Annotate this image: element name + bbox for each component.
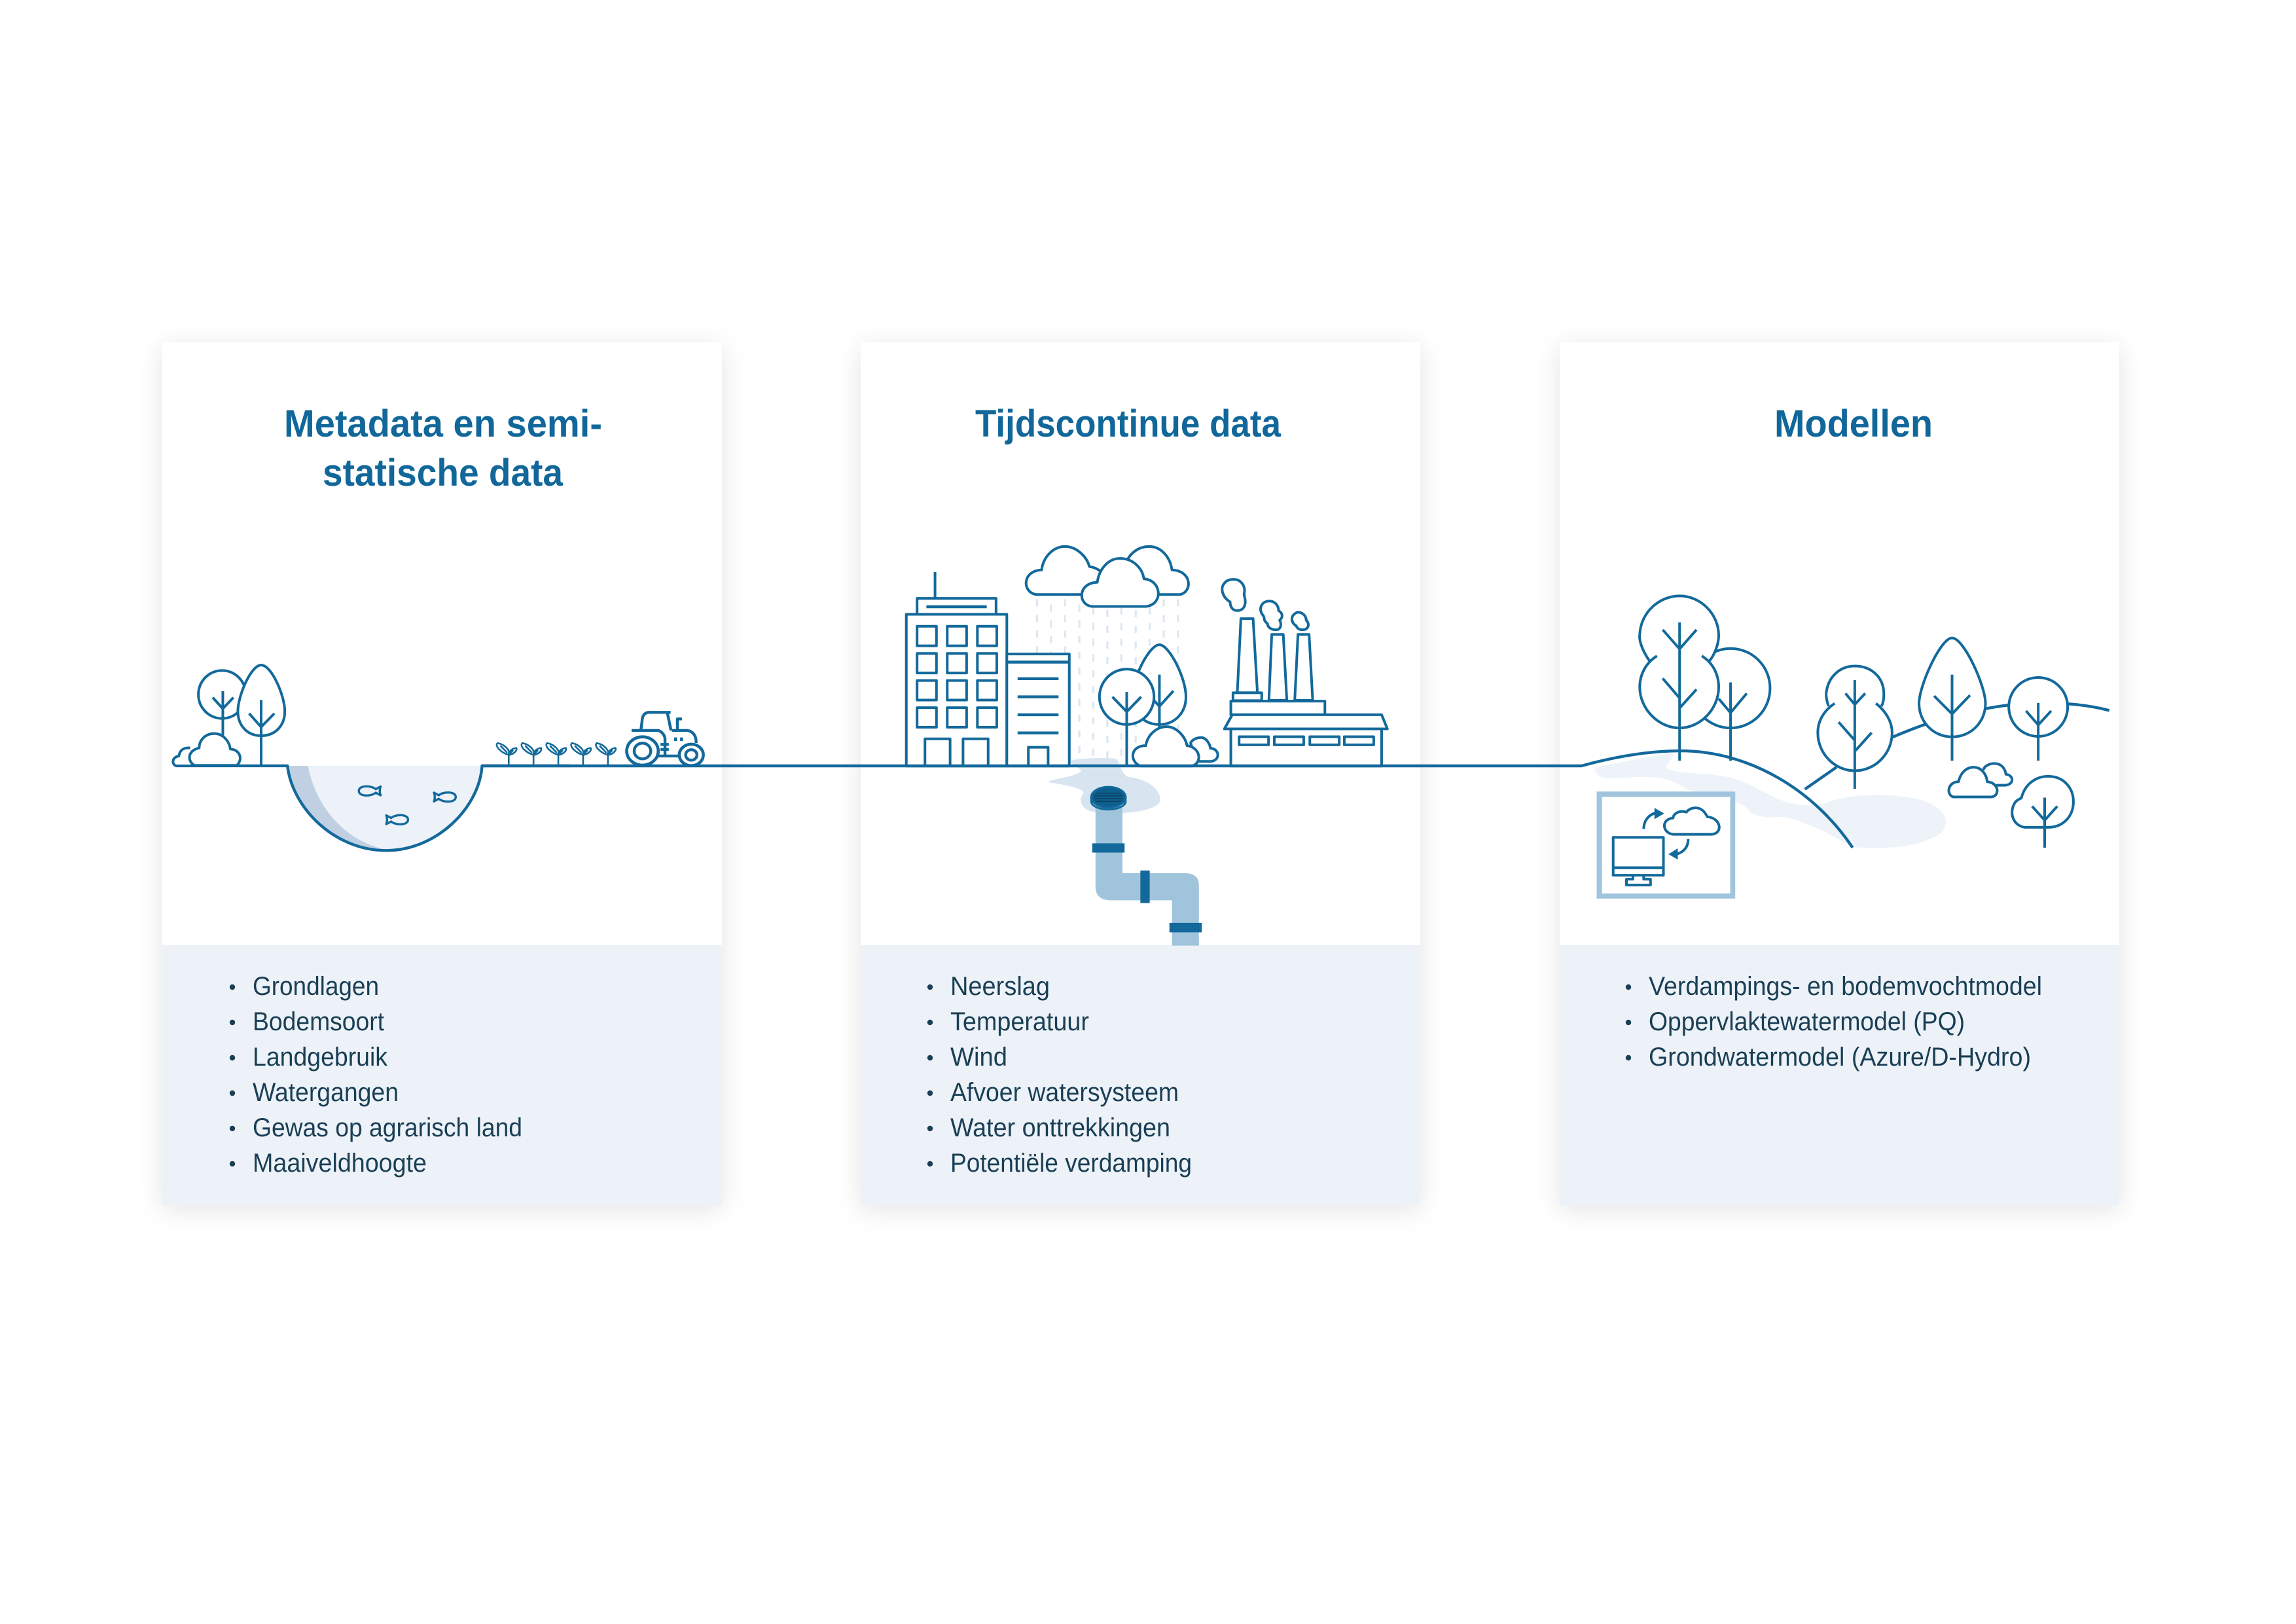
rain: [1037, 599, 1178, 759]
crop seedlings: [497, 743, 616, 766]
trees right: [1818, 638, 2073, 848]
bullet list: Potentiële verdamping: [950, 1149, 1192, 1178]
icon: tractor: [627, 712, 704, 766]
heading: Metadata en semi-: [284, 403, 602, 445]
hills: [1581, 704, 2109, 848]
list background: [1560, 945, 2119, 1205]
bullet list: Temperatuur: [950, 1007, 1089, 1036]
bullet list: Landgebruik: [253, 1043, 388, 1072]
bullet list: [927, 972, 1192, 1178]
bullet list: Afvoer watersysteem: [950, 1078, 1179, 1107]
bullet list: Water onttrekkingen: [950, 1113, 1170, 1142]
trees left: [1640, 596, 1770, 761]
heading: statische data: [323, 452, 564, 494]
office buildings: [906, 572, 1069, 766]
bullet list: [230, 972, 522, 1178]
list background: [861, 945, 1420, 1205]
clouds: [1949, 763, 2012, 797]
bullet list: Wind: [950, 1043, 1007, 1072]
trees and bush: [173, 665, 285, 766]
bullet list: Maaiveldhoogte: [253, 1149, 427, 1178]
panel: modellen: [1560, 342, 2119, 1205]
icon: drain cover: [1091, 787, 1126, 810]
model frame with computer and cloud: [1596, 791, 1735, 899]
bullet list: Verdampings- en bodemvochtmodel: [1649, 972, 2042, 1001]
heading: Modellen: [1774, 403, 1933, 445]
drain pipe: [1092, 808, 1202, 946]
clouds: [1026, 547, 1189, 607]
panel: tijdscontinue data: [861, 342, 1420, 1205]
illustration: trees, pond, crops and tractor: [173, 665, 704, 850]
puddle: [1049, 758, 1160, 814]
heading: Tijdscontinue data: [975, 403, 1282, 445]
trees and bushes: [1100, 645, 1218, 766]
bullet list: Grondwatermodel (Azure/D-Hydro): [1649, 1043, 2031, 1072]
panel: metadata en semi-statische data: [162, 342, 722, 1205]
bullet list: Gewas op agrarisch land: [253, 1113, 522, 1142]
bullet list: Grondlagen: [253, 972, 379, 1001]
bullet list: [1626, 972, 2042, 1072]
illustration: city, rain, factory and drain pipe: [906, 547, 1388, 946]
bullet list: Neerslag: [950, 972, 1050, 1001]
factory: [1222, 579, 1388, 766]
bullet list: Watergangen: [253, 1078, 399, 1107]
pond with fish: [176, 766, 570, 850]
water area: [1595, 753, 1946, 848]
list background: [162, 945, 722, 1205]
heading: [284, 403, 602, 494]
bullet list: Oppervlaktewatermodel (PQ): [1649, 1007, 1965, 1036]
bullet list: Bodemsoort: [253, 1007, 384, 1036]
illustration: hills, trees and model frame: [1581, 596, 2109, 899]
